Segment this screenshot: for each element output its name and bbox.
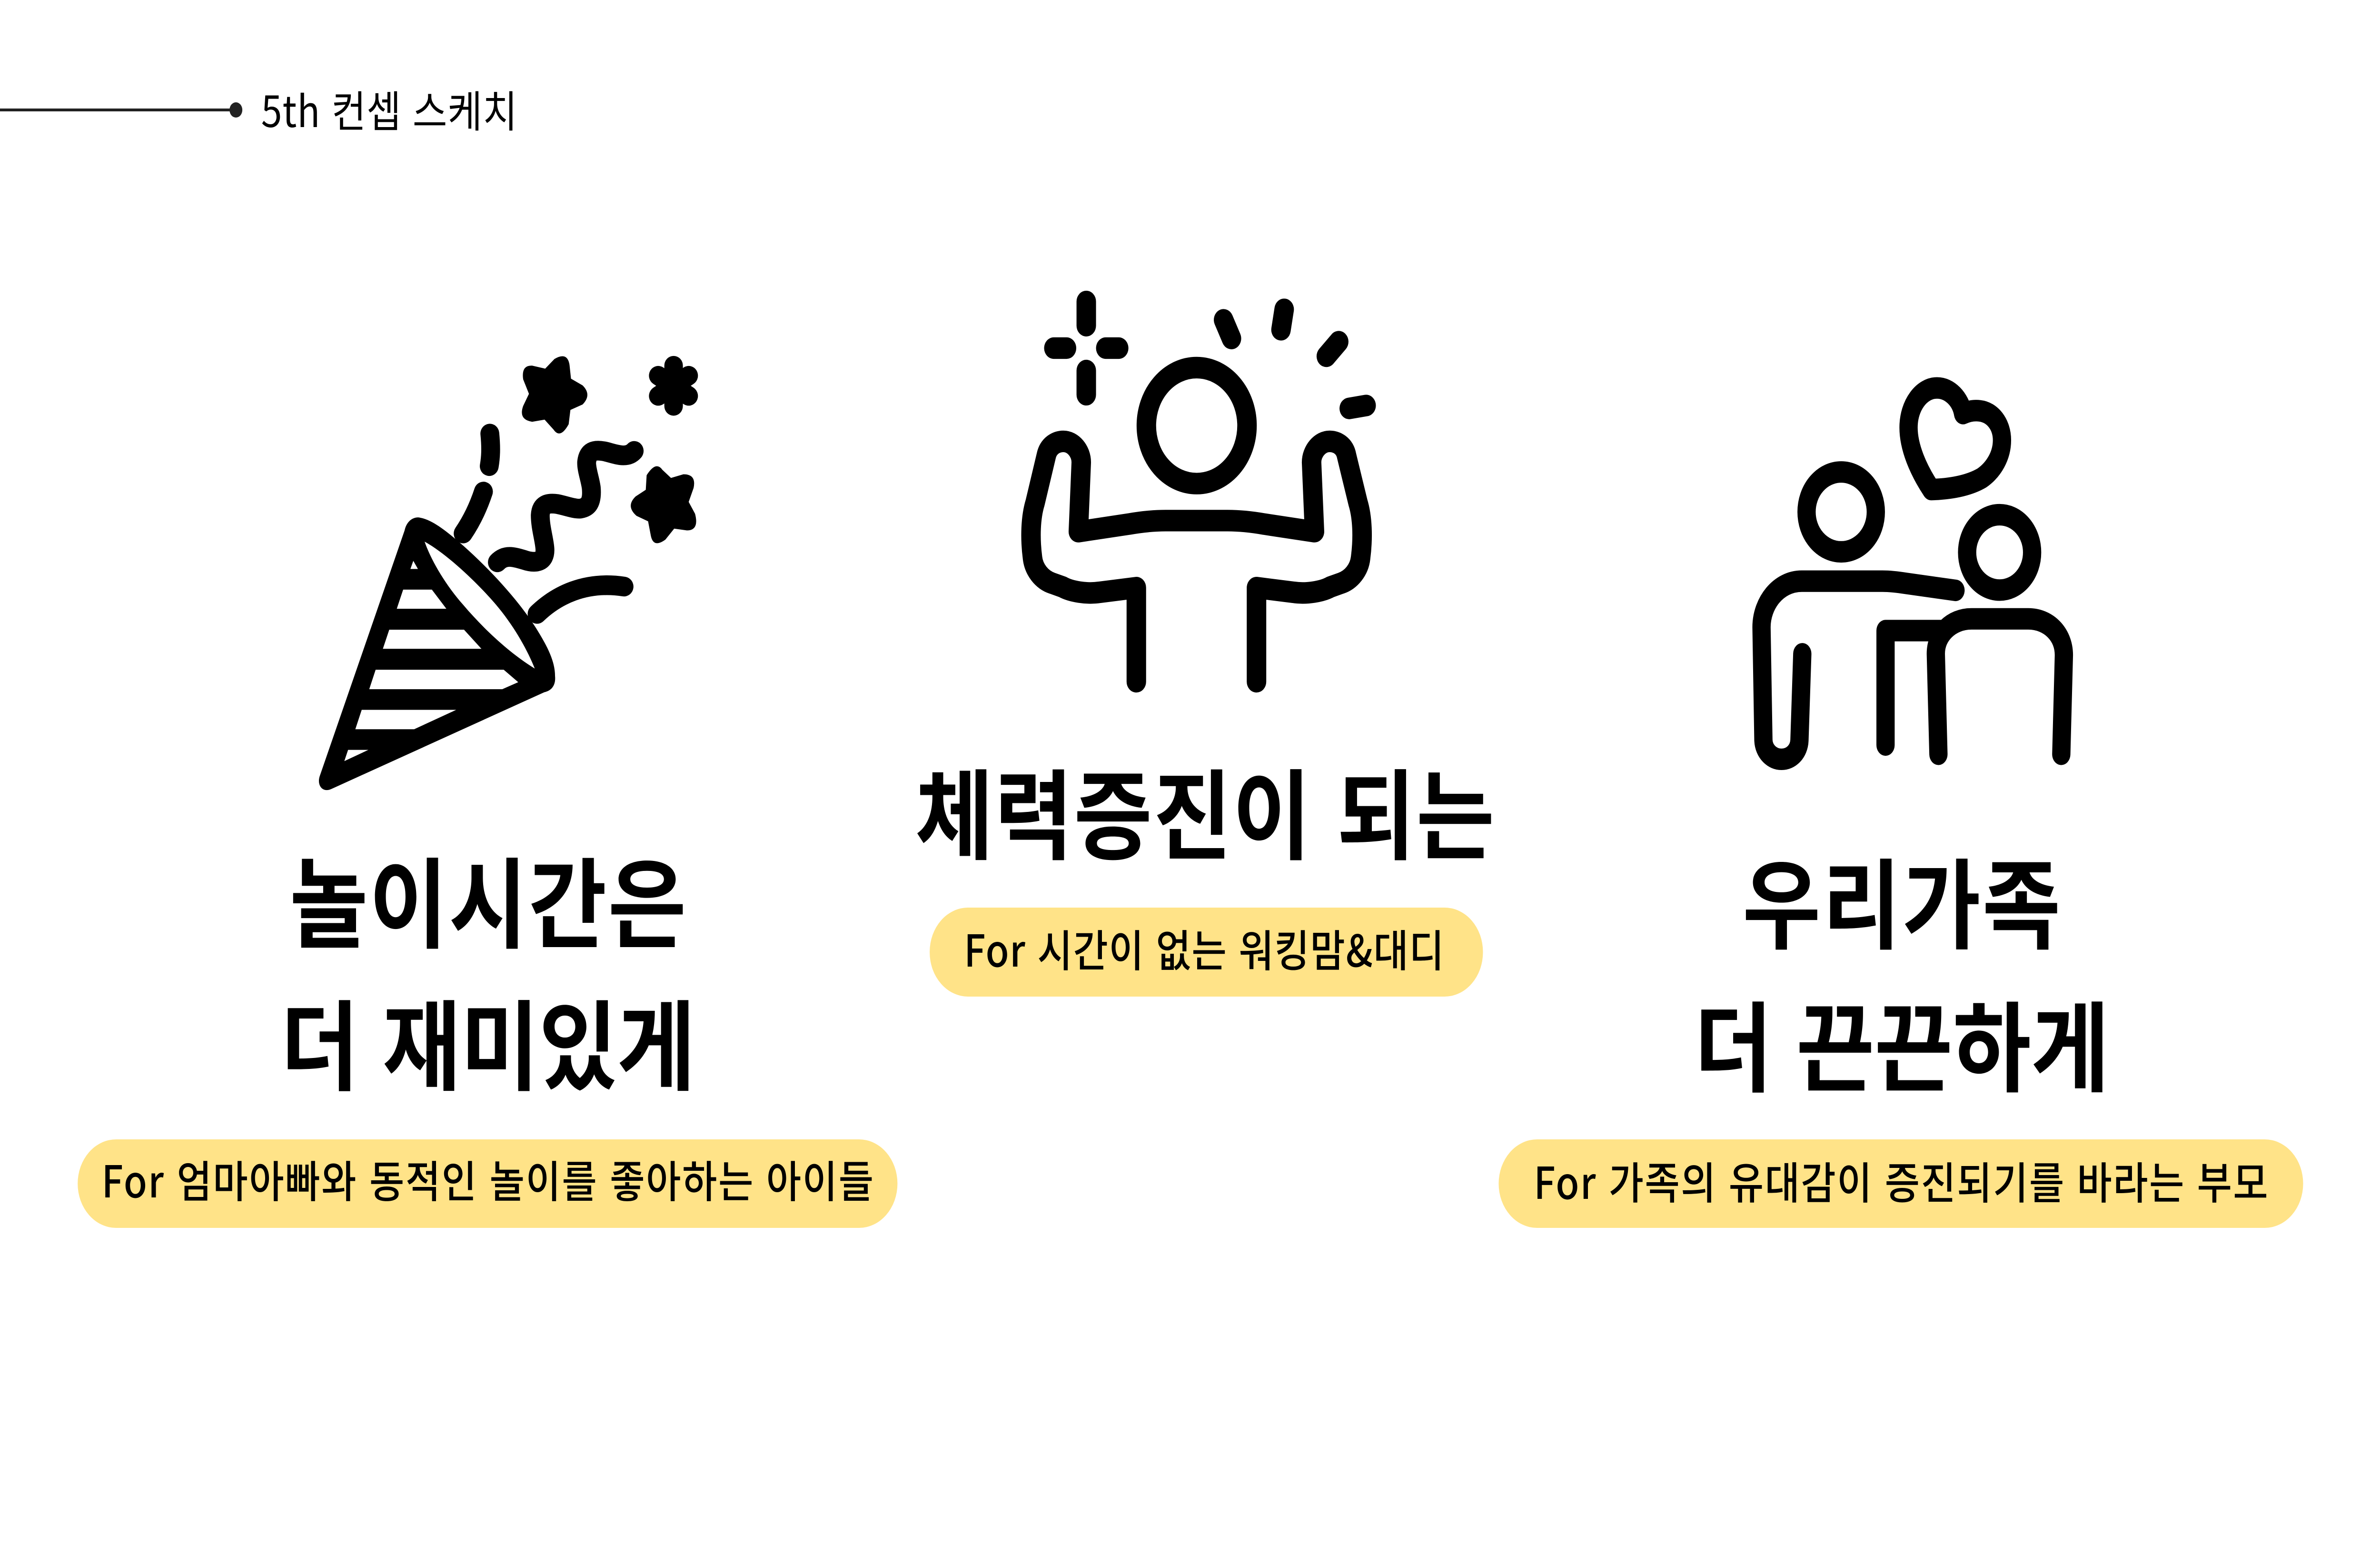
header dot <box>229 102 242 118</box>
heading: left column: 놀이시간은 <box>290 826 686 969</box>
confetti star right <box>631 466 696 543</box>
pill: middle audience <box>930 908 1483 997</box>
person head <box>1146 367 1247 484</box>
header: section label with line and dot <box>0 77 517 140</box>
icon: party popper <box>319 356 696 790</box>
child body <box>1936 619 2064 754</box>
heading: right column: 더 끈끈하게 <box>1694 970 2109 1112</box>
heart <box>1909 388 2002 490</box>
child head <box>1967 514 2032 590</box>
pill: left audience <box>78 1139 897 1228</box>
header line <box>0 109 231 111</box>
parent head <box>1806 472 1876 552</box>
heading: left column: 더 재미있게 <box>280 969 695 1111</box>
party cone with stripes <box>319 517 555 790</box>
sparkle <box>1054 301 1119 395</box>
pill text right: For 가족의 유대감이 증진되기를 바라는 부모 <box>1534 1148 2268 1212</box>
heading: right column <box>1694 827 2109 1112</box>
pill text left: For 엄마아빠와 동적인 놀이를 좋아하는 아이들 <box>102 1147 873 1210</box>
confetti flower <box>658 366 689 406</box>
confetti streamers <box>463 434 634 614</box>
icon: family with heart <box>1762 388 2064 759</box>
heading: middle column: 체력증진이 되는 <box>915 738 1495 880</box>
confetti star top <box>522 356 587 434</box>
person body with flexed arms <box>1031 441 1362 682</box>
pill text middle: For 시간이 없는 워킹맘&대디 <box>964 916 1444 979</box>
parent body with arm <box>1762 581 1955 759</box>
icon: strong person flexing <box>1031 301 1366 682</box>
heading: left column <box>280 826 695 1111</box>
heading: right column: 우리가족 <box>1743 827 2061 969</box>
pill: right audience <box>1498 1139 2303 1228</box>
energy rays <box>1224 309 1366 408</box>
parent second arm <box>1885 631 1942 745</box>
header text: 5th 컨셉 스케치 <box>261 77 517 140</box>
